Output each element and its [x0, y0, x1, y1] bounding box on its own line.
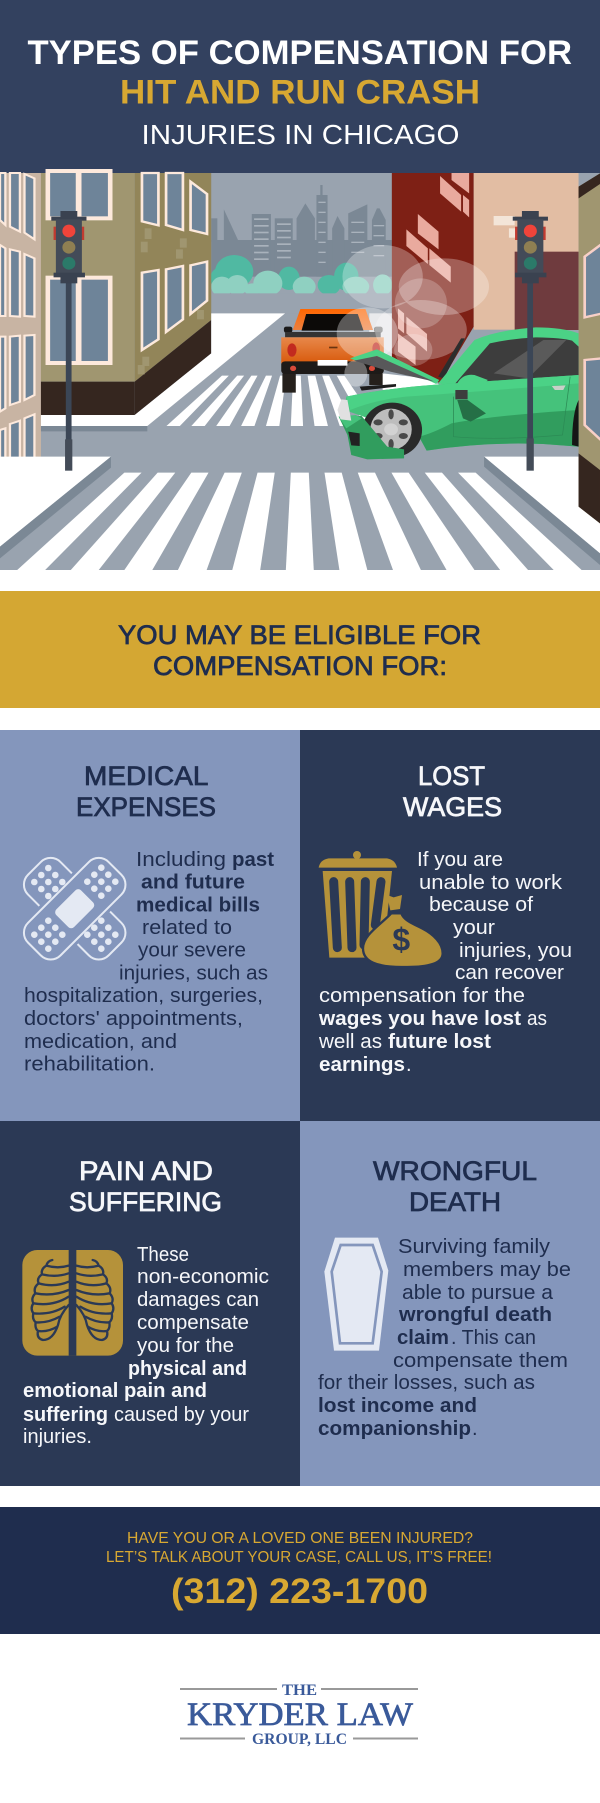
- body text: medical expenses: past: [232, 849, 274, 871]
- banner: eligibility heading: [0, 591, 600, 708]
- icon: coffin: [324, 1238, 388, 1351]
- body text: lost wages: as: [527, 1008, 547, 1030]
- heading: lost wages: [403, 761, 502, 822]
- right near building: [579, 173, 600, 523]
- heading: medical expenses: [76, 761, 216, 822]
- body text: wrongful death: for their losses, such as: [318, 1372, 535, 1394]
- trees: [210, 255, 359, 295]
- body text: lost wages: If you are: [417, 849, 503, 871]
- body text: wrongful death: claim: [397, 1327, 449, 1349]
- body text: lost wages: compensation for the: [319, 985, 525, 1007]
- body text: pain and suffering: caused by your: [114, 1404, 249, 1426]
- heading: pain and suffering: SUFFERING: [69, 1187, 222, 1217]
- body text: pain and suffering: suffering: [23, 1404, 108, 1426]
- icon: trash can with money bag: [319, 851, 443, 967]
- heading: lost wages: WAGES: [403, 792, 502, 822]
- call to action footer: (312) 223-1700: [171, 1572, 428, 1611]
- body text: pain and suffering: damages can: [137, 1289, 259, 1311]
- body text: wrongful death: lost income and: [318, 1395, 477, 1417]
- traffic light left: [51, 211, 86, 471]
- heading: medical expenses: EXPENSES: [76, 792, 216, 822]
- body text: lost wages: well as: [318, 1031, 382, 1053]
- green crashed car: [337, 327, 579, 459]
- panel: lost wages: [300, 730, 600, 1121]
- body text: lost wages: your: [453, 917, 495, 939]
- beige building: [474, 173, 579, 330]
- body text: pain and suffering: compensate: [137, 1312, 249, 1334]
- far sidewalk: [41, 313, 285, 426]
- panel: wrongful death: [300, 1121, 600, 1486]
- near sidewalks: [0, 457, 111, 547]
- body text: wrongful death: wrongful death: [398, 1304, 552, 1326]
- heading: wrongful death: [373, 1156, 537, 1217]
- banner: eligibility heading: COMPENSATION FOR:: [153, 651, 447, 681]
- illustration: hit and run crash street scene: [0, 171, 600, 570]
- body text: lost wages: future lost: [388, 1031, 491, 1053]
- body text: lost wages: unable to work: [419, 872, 563, 894]
- body text: wrongful death: able to pursue a: [402, 1282, 554, 1304]
- body text: lost wages: because of: [429, 894, 533, 916]
- smoke: [337, 245, 489, 387]
- body text: wrongful death: Surviving family: [398, 1236, 550, 1258]
- panel: medical expenses: [0, 730, 300, 1121]
- body text: pain and suffering: non-economic: [137, 1266, 269, 1288]
- far crosswalk: [166, 376, 377, 426]
- body text: lost wages: [318, 849, 572, 1076]
- traffic light right: [513, 211, 548, 471]
- icon: trash can with money bag: $: [392, 922, 410, 958]
- heading: lost wages: LOST: [418, 761, 485, 791]
- body text: medical expenses: and future: [141, 872, 245, 894]
- call to action footer: [0, 1507, 600, 1634]
- panel: pain and suffering: [0, 1121, 300, 1486]
- orange pickup: [281, 309, 384, 393]
- logo: The Kryder Law Group, LLC: THE: [282, 1682, 317, 1699]
- body text: medical expenses: rehabilitation.: [24, 1054, 155, 1076]
- logo: The Kryder Law Group, LLC: GROUP, LLC: [252, 1731, 347, 1748]
- heading: medical expenses: MEDICAL: [84, 761, 208, 791]
- left far building: [0, 173, 41, 527]
- body text: medical expenses: injuries, such as: [119, 962, 268, 984]
- body text: medical expenses: doctors' appointments,: [24, 1008, 243, 1030]
- banner: eligibility heading: YOU MAY BE ELIGIBLE FOR: [118, 620, 481, 650]
- body text: lost wages: injuries, you: [459, 940, 572, 962]
- skyline: [211, 185, 392, 277]
- near crosswalk: [17, 473, 582, 570]
- icon: rib cage: [22, 1250, 123, 1356]
- heading: pain and suffering: [69, 1156, 222, 1217]
- body text: medical expenses: Including: [136, 849, 226, 871]
- body text: medical expenses: medical bills: [136, 894, 260, 916]
- body text: wrongful death: . This can: [451, 1327, 536, 1349]
- body text: pain and suffering: These: [137, 1244, 189, 1266]
- body text: lost wages: wages you have lost: [318, 1008, 521, 1030]
- header panel: INJURIES IN CHICAGO: [142, 119, 460, 150]
- body text: medical expenses: medication, and: [24, 1031, 177, 1053]
- body text: pain and suffering: [23, 1244, 269, 1448]
- heading: wrongful death: WRONGFUL: [373, 1156, 537, 1186]
- body text: pain and suffering: injuries.: [23, 1426, 92, 1448]
- olive corner building: [41, 173, 135, 382]
- body text: pain and suffering: physical and: [128, 1358, 247, 1380]
- logo: The Kryder Law Group, LLC: KRYDER LAW: [187, 1697, 414, 1733]
- body text: medical expenses: your severe: [138, 940, 246, 962]
- call to action footer: HAVE YOU OR A LOVED ONE BEEN INJURED?: [127, 1530, 473, 1547]
- body text: lost wages: .: [406, 1054, 412, 1076]
- header panel: HIT AND RUN CRASH: [120, 74, 480, 112]
- body text: medical expenses: hospitalization, surgeries,: [24, 985, 263, 1007]
- body text: wrongful death: compensate them: [393, 1350, 568, 1372]
- header panel: TYPES OF COMPENSATION FOR: [28, 34, 572, 72]
- body text: pain and suffering: you for the: [137, 1335, 234, 1357]
- body text: wrongful death: [318, 1236, 571, 1440]
- call to action footer: LET’S TALK ABOUT YOUR CASE, CALL US, IT’S FREE!: [106, 1549, 492, 1566]
- body text: wrongful death: .: [472, 1418, 478, 1440]
- body text: medical expenses: [24, 849, 274, 1076]
- header panel: [0, 0, 600, 173]
- logo: The Kryder Law Group, LLC: [180, 1682, 418, 1748]
- heading: pain and suffering: PAIN AND: [79, 1156, 213, 1186]
- body text: pain and suffering: emotional pain and: [23, 1380, 207, 1402]
- body text: medical expenses: related to: [142, 917, 232, 939]
- body text: wrongful death: members may be: [403, 1259, 571, 1281]
- icon: crossed bandages: [18, 852, 131, 965]
- body text: lost wages: earnings: [319, 1054, 405, 1076]
- red brick building: [392, 173, 474, 383]
- body text: lost wages: can recover: [455, 962, 564, 984]
- heading: wrongful death: DEATH: [409, 1187, 501, 1217]
- body text: wrongful death: companionship: [318, 1418, 471, 1440]
